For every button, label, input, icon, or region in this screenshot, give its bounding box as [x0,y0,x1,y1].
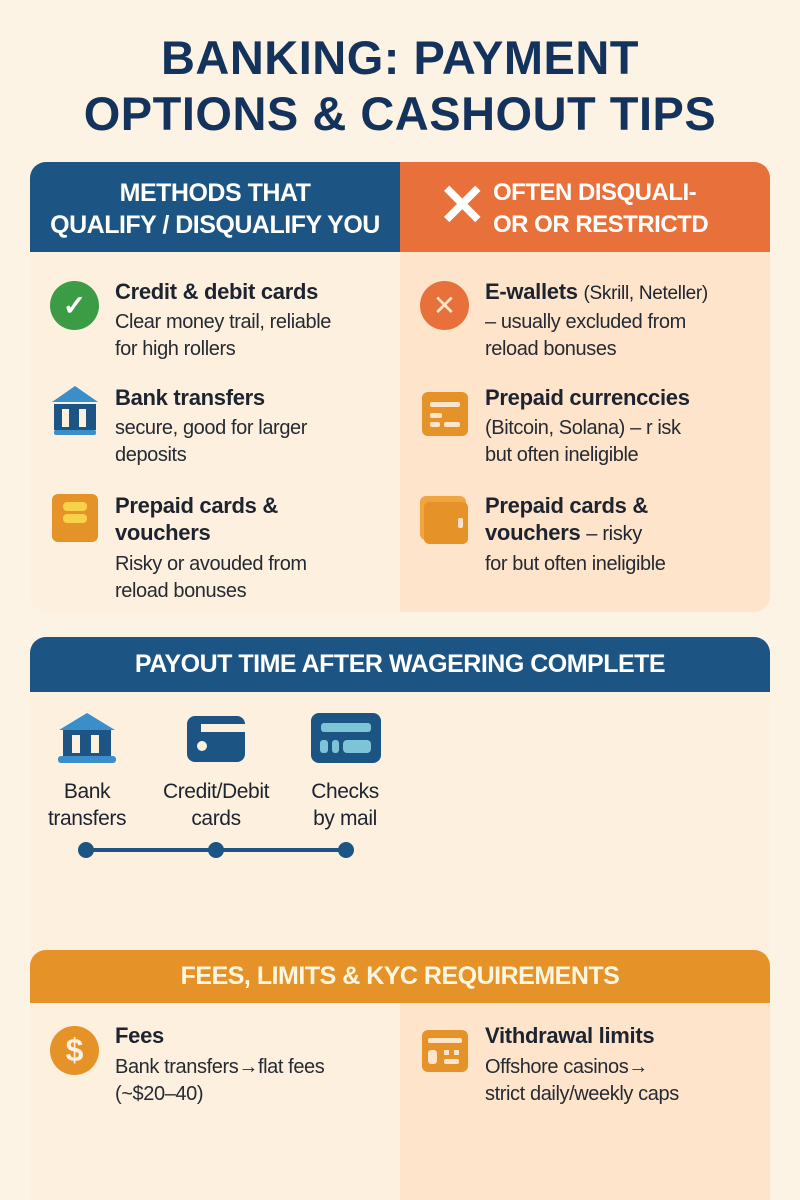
timeline [78,842,354,858]
item: prepaid currencies: but often ineligible [485,444,638,466]
header right [400,162,770,252]
icon: check [50,281,99,330]
icon: dollar [50,1026,99,1075]
header [30,637,770,692]
item: withdrawal limits: Vithdrawal limits [485,1023,654,1048]
item: withdrawal limits [422,1023,679,1105]
item: prepaid currencies [422,385,690,466]
header [30,950,770,1003]
panel: fees [30,950,770,1200]
icon: check: ✓ [63,290,86,321]
item: prepaid cards: reload bonuses [115,580,246,602]
item: prepaid cards: Risky or avouded from [115,553,307,575]
item: credit cards: Clear money trail, reliable [115,311,331,333]
item: e-wallets: – usually excluded from [485,311,686,333]
icon: voucher [52,494,98,542]
item: fees: (~$20–40) [115,1083,203,1105]
labels payout: Credit/Debit [163,780,269,803]
item: credit cards: Credit & debit cards [115,279,318,304]
icon: bank payout [58,713,116,763]
item: prepaid currencies: Prepaid currenccies [485,385,690,410]
item: fees [50,1023,324,1105]
header: PAYOUT TIME AFTER WAGERING COMPLETE [135,650,665,678]
icon: card payout [187,716,245,762]
icon: card [422,392,468,436]
item: bank transfers: Bank transfers [115,385,265,410]
item: prepaid vouchers: vouchers – risky [485,520,642,545]
header left [30,162,400,252]
item: fees: Bank transfers→flat fees [115,1056,324,1078]
icon: x: ✕ [438,173,486,238]
header left: QUALIFY / DISQUALIFY YOU [50,211,380,239]
icon: id card [422,1030,468,1072]
labels payout [48,780,379,830]
item: prepaid cards: vouchers [115,520,210,545]
icon: wallet [420,496,468,544]
title: OPTIONS & CASHOUT TIPS [84,87,716,140]
item: prepaid vouchers: Prepaid cards & [485,493,648,518]
labels payout: by mail [313,807,377,830]
item: bank transfers: secure, good for larger [115,417,307,439]
item: e-wallets: reload bonuses [485,338,616,360]
item: bank transfers [52,385,308,466]
labels payout: cards [191,807,241,830]
header right: OFTEN DISQUALI- [493,179,696,206]
item: prepaid vouchers: for but often ineligible [485,553,666,575]
header: FEES, LIMITS & KYC REQUIREMENTS [181,962,619,990]
icon: bank [52,386,98,435]
item: prepaid cards: Prepaid cards & [115,493,278,518]
item: e-wallets: E-wallets (Skrill, Neteller) [485,279,708,304]
item: withdrawal limits: Offshore casinos→ [485,1056,648,1078]
item: credit cards: for high rollers [115,338,235,360]
item: fees: Fees [115,1023,164,1048]
item: e-wallets [420,279,708,360]
item: prepaid cards [52,493,307,602]
icon: x circle: ✕ [433,290,456,321]
item: bank transfers: deposits [115,444,186,466]
panel: payout time [30,637,770,1045]
header right: OR OR RESTRICTD [493,211,708,238]
labels payout: transfers [48,807,126,830]
header left: METHODS THAT [120,179,310,207]
title [84,31,716,140]
icon: dollar: $ [66,1032,83,1068]
right body [400,252,770,612]
item: prepaid vouchers [420,493,666,575]
panel: methods [30,162,770,612]
labels payout: Bank [64,780,110,803]
item: withdrawal limits: strict daily/weekly caps [485,1083,679,1105]
icon: x circle [420,281,469,330]
item: credit cards [50,279,331,360]
title: BANKING: PAYMENT [161,31,639,84]
icon: check payout [311,713,381,763]
labels payout: Checks [311,780,379,803]
item: prepaid currencies: (Bitcoin, Solana) – r isk [485,417,681,439]
